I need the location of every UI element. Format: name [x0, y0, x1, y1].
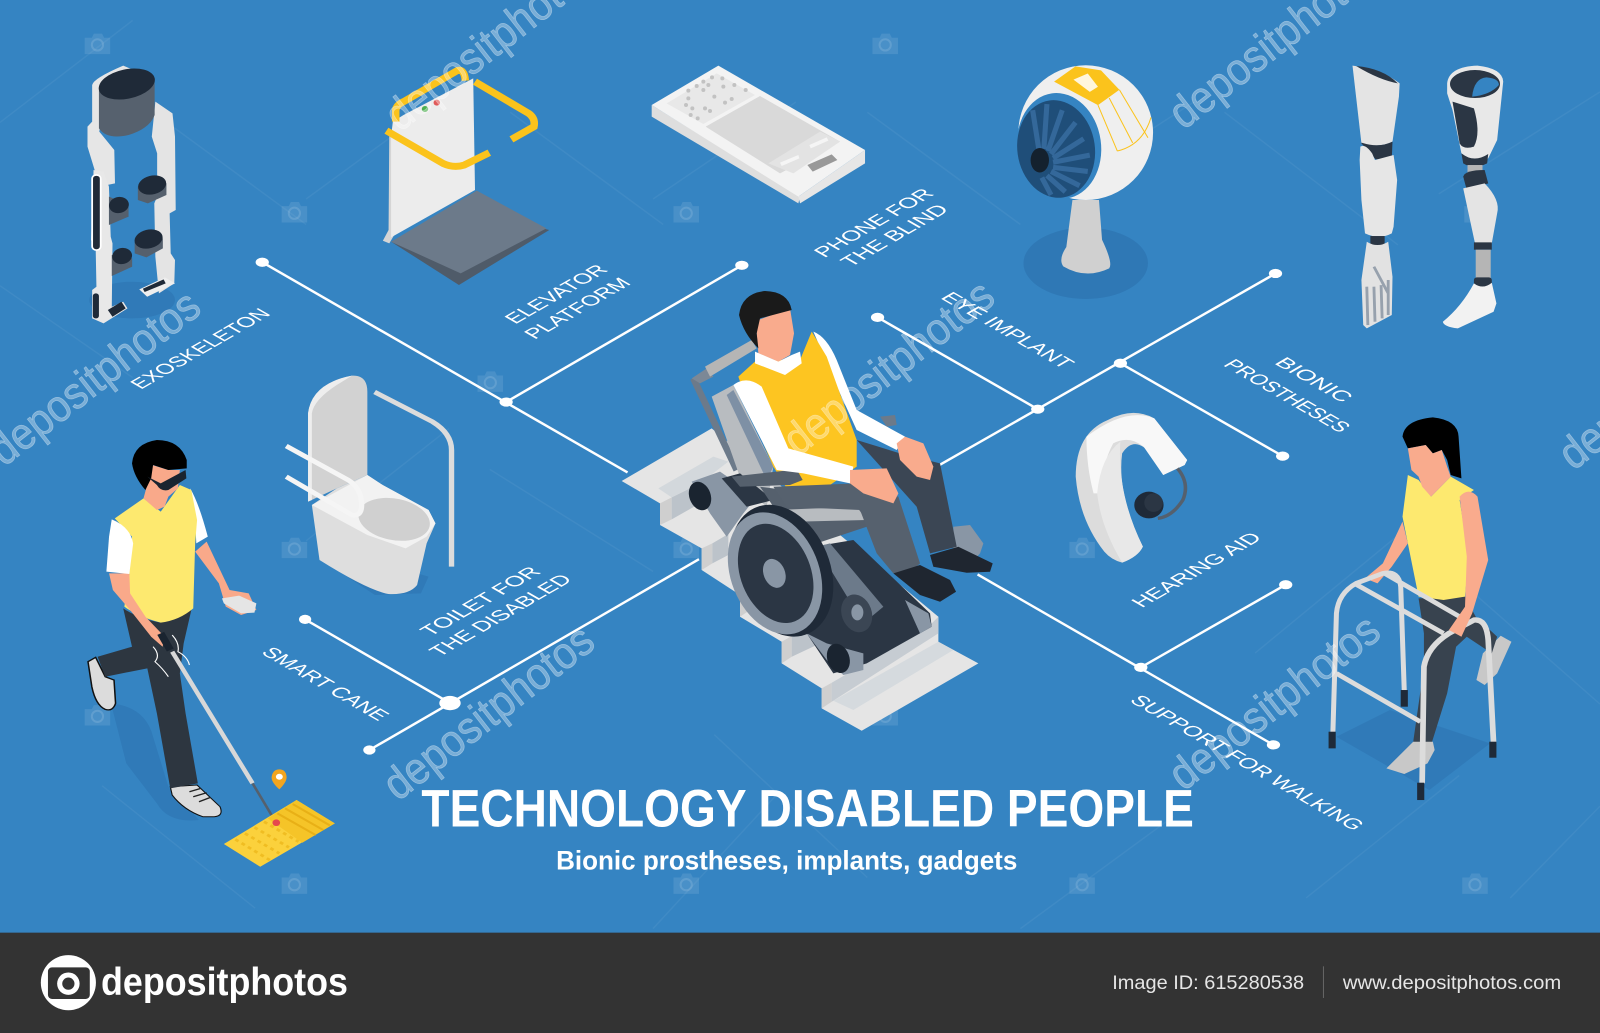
- illustration: man in stair-climbing wheelchair: [622, 291, 993, 731]
- footer website: www.depositphotos.com: [1342, 972, 1561, 994]
- label: exoskeleton: EXOSKELETON: [126, 306, 276, 392]
- icon: hearing aid: [1076, 413, 1187, 563]
- watermark camera icons: [85, 34, 1490, 894]
- label: toilet for the disabled: TOILET FOR: [416, 564, 546, 639]
- label: smart cane: SMART CANE: [256, 645, 393, 724]
- footer image id: Image ID: 615280538: [1112, 972, 1304, 994]
- title: TECHNOLOGY DISABLED PEOPLE: [421, 780, 1194, 839]
- watermark text: [0, 0, 1600, 810]
- icon: eye implant: [1010, 65, 1153, 299]
- connector lines: hearing aid and walking support: [978, 574, 1292, 749]
- wheelchair big wheel: [710, 489, 852, 652]
- icon: bionic arm prosthesis: [1352, 66, 1400, 328]
- watermark text: depositphotos: [1158, 604, 1389, 800]
- label: toilet for the disabled: THE DISABLED: [425, 572, 578, 660]
- label: elevator platform: PLATFORM: [520, 275, 636, 342]
- icon: depositphotos logo: [41, 955, 96, 1010]
- illustration: blind man with smart cane: [88, 440, 335, 867]
- icon: toilet for the disabled: [286, 376, 452, 595]
- illustration: woman with walking frame: [1329, 417, 1511, 800]
- icon: elevator platform: [383, 70, 549, 285]
- seated man: [732, 291, 993, 602]
- footrest: [953, 525, 983, 572]
- icon: exoskeleton: [88, 64, 176, 323]
- label: elevator platform: [501, 262, 636, 342]
- label: support for walking: SUPPORT FOR WALKING: [1124, 693, 1369, 834]
- label: phone for the blind: THE BLIND: [836, 202, 954, 270]
- stairs: [622, 428, 978, 731]
- watermark text: depositphotos: [773, 269, 1004, 465]
- icon: bionic leg prosthesis: [1443, 66, 1503, 328]
- label: hearing aid: HEARING AID: [1127, 530, 1267, 611]
- label: bionic prostheses: BIONIC: [1269, 355, 1357, 406]
- label: eye implant: EYE IMPLANT: [935, 289, 1078, 372]
- watermark text: depositphotos: [373, 614, 604, 810]
- subtitle: Bionic prostheses, implants, gadgets: [556, 845, 1017, 875]
- icon: phone for the blind: [652, 66, 865, 203]
- connector lines: smart cane and toilet: [299, 559, 699, 755]
- connector lines: elevator platform and exoskeleton: [256, 258, 748, 472]
- label: bionic prostheses: PROSTHESES: [1218, 357, 1355, 436]
- label: phone for the blind: PHONE FOR: [810, 186, 939, 261]
- footer bar: [0, 933, 1600, 1033]
- wheelchair frame and tracks: [685, 472, 932, 676]
- label: elevator platform: ELEVATOR: [501, 262, 613, 327]
- wheelchair back and headrest: [692, 340, 897, 507]
- footer brand text: depositphotos: [101, 961, 348, 1004]
- connector lines: eye implant and bionic prostheses: [871, 269, 1289, 468]
